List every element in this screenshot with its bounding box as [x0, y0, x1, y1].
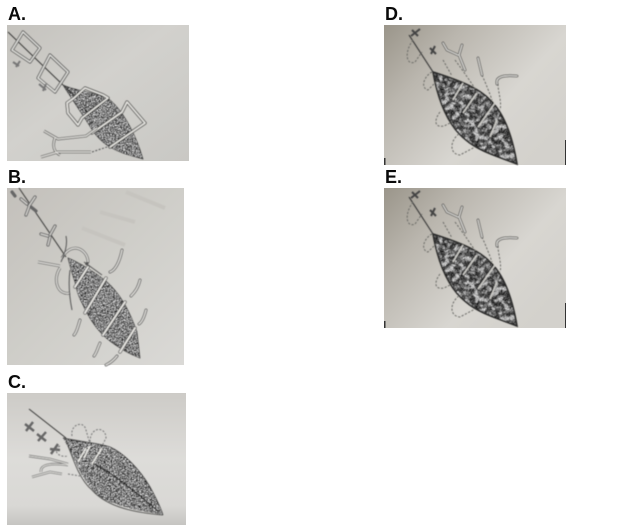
sutures C — [78, 446, 102, 464]
thread B — [19, 188, 66, 257]
loose suture A — [41, 128, 97, 157]
knots A — [12, 32, 68, 92]
knots D — [411, 29, 436, 54]
spiral sutures B — [75, 267, 135, 352]
panel: illustration A, interrupted mattress suture — [7, 25, 189, 161]
label: C: C. — [8, 372, 26, 392]
faint ghost marks B — [82, 192, 165, 245]
thread A — [8, 32, 63, 85]
label: B: B. — [8, 167, 26, 187]
thread D — [409, 35, 433, 72]
bars D — [453, 83, 497, 137]
wound B — [68, 258, 140, 358]
panel: illustration B, spiral suture — [7, 188, 184, 365]
label: D: D. — [385, 4, 403, 24]
wound E — [433, 234, 517, 326]
suture segments B — [74, 250, 146, 365]
dashed loops D — [407, 40, 501, 155]
loose threads D — [443, 43, 517, 84]
knots E — [411, 191, 436, 216]
loose threads C — [29, 456, 68, 477]
label: A: A. — [8, 4, 26, 24]
dashed loops E — [407, 202, 501, 317]
loose threads E — [443, 205, 517, 246]
panel: illustration E, continuous suture dashed loops — [384, 188, 566, 328]
knots B — [12, 192, 55, 245]
panel: illustration C, continuous suture start — [7, 393, 186, 525]
loop B — [38, 248, 88, 293]
panel: illustration D, continuous suture dashed loops — [384, 25, 566, 165]
knots C — [25, 422, 60, 454]
thread E — [409, 197, 433, 234]
sutures across wound A — [67, 88, 145, 147]
thread C — [29, 409, 66, 438]
label: E: E. — [385, 167, 402, 187]
bars E — [453, 245, 497, 299]
wound C — [63, 438, 163, 515]
wound A — [63, 85, 143, 159]
wound D — [433, 72, 517, 164]
dashed loops C — [56, 424, 106, 476]
